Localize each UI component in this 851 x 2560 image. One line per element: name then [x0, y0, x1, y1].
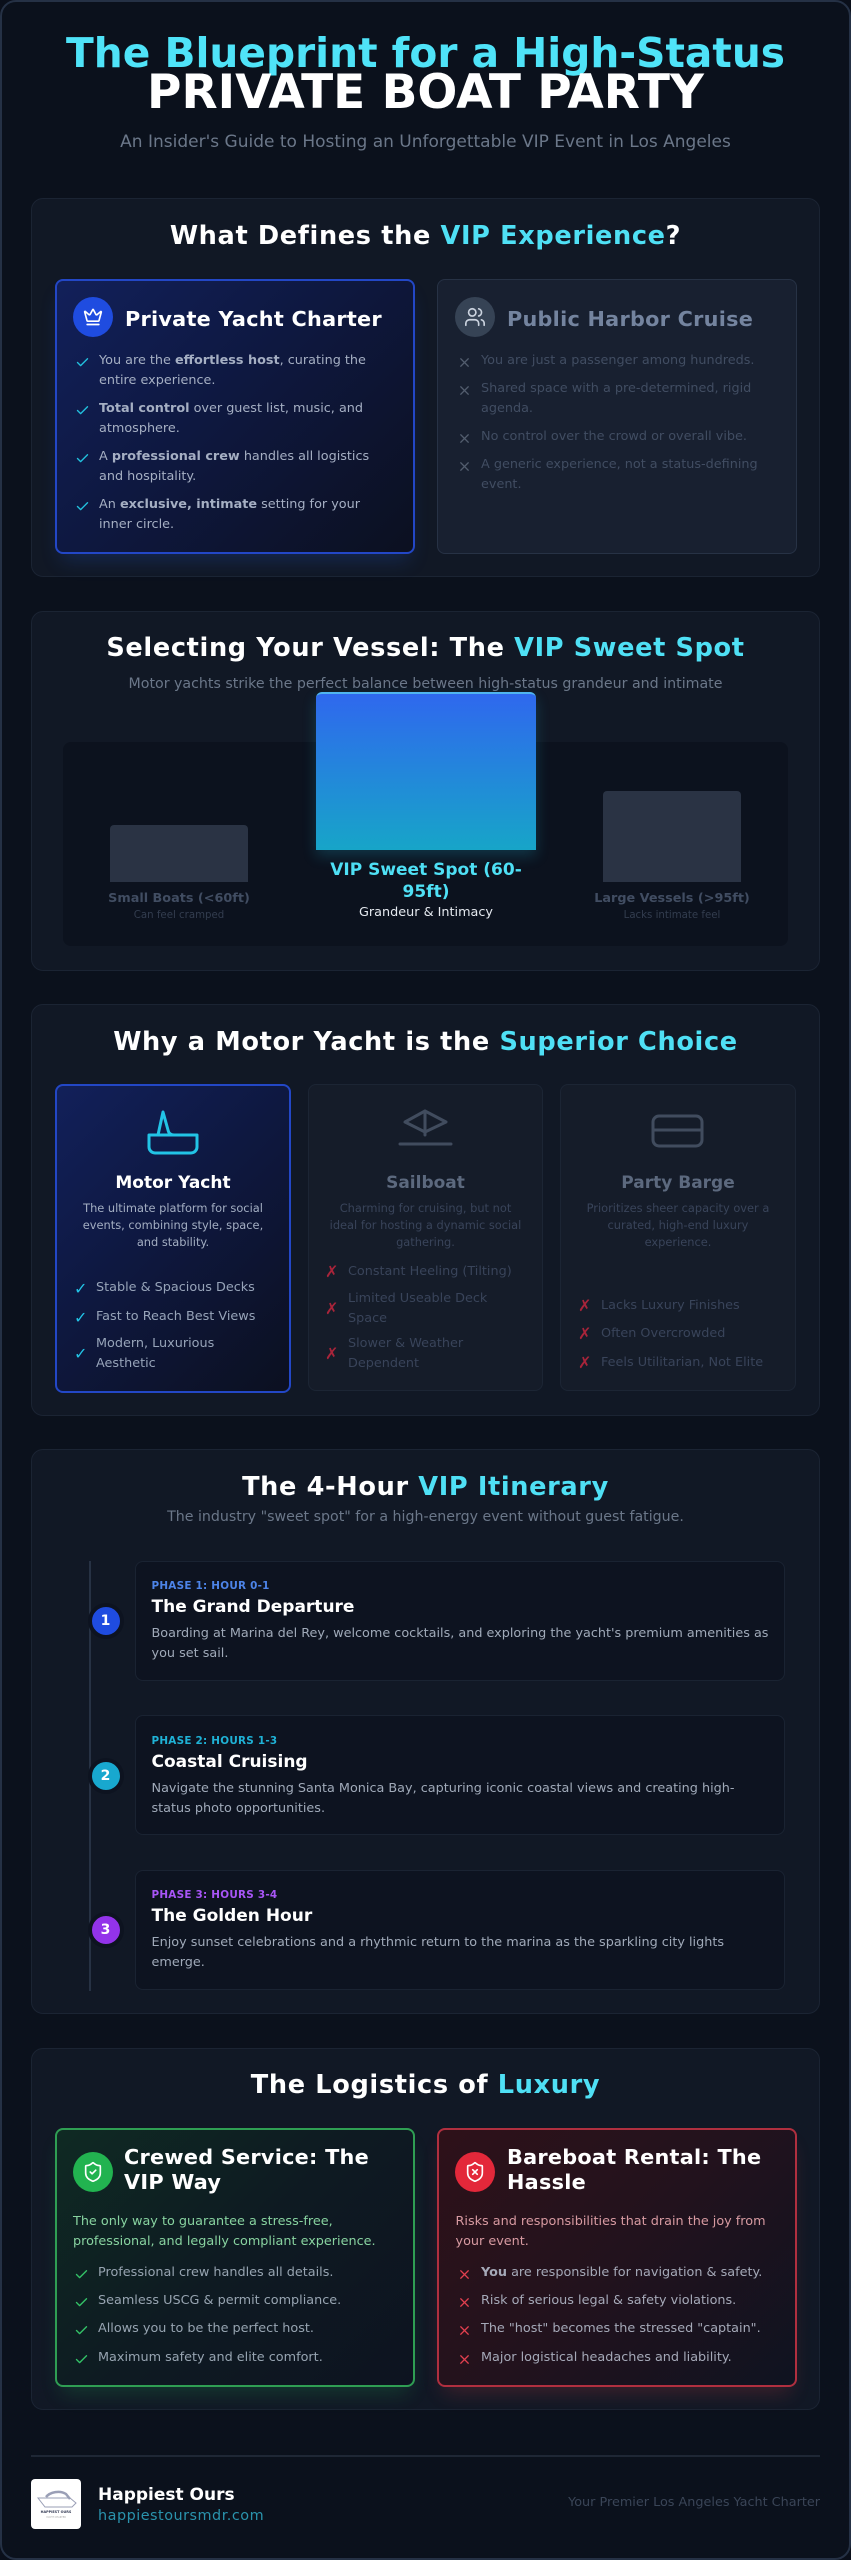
- timeline card 1: [135, 1561, 785, 1681]
- text: ✗: [578, 1324, 591, 1343]
- card description: party barge: curated, high-end luxury: [608, 1218, 748, 1232]
- panel: private yacht charter: [55, 279, 415, 554]
- step description 1: [152, 1626, 768, 1661]
- chart backdrop: [63, 742, 788, 946]
- feature: Often Overcrowded: [601, 1326, 725, 1341]
- card description: motor yacht: [83, 1201, 263, 1249]
- list item: Seamless USCG & permit compliance.: [98, 2293, 341, 2308]
- text: ✓: [74, 1308, 87, 1327]
- node 1: 1: [101, 1613, 110, 1629]
- step description 3: [152, 1935, 724, 1970]
- step title 1: The Grand Departure: [152, 1597, 354, 1617]
- card description: sailboat: gathering.: [396, 1235, 455, 1249]
- list item: [76, 353, 366, 388]
- feature: Modern, Luxurious: [96, 1336, 214, 1351]
- feature: Limited Useable Deck: [348, 1291, 487, 1306]
- step description 2: [152, 1781, 734, 1816]
- node 2: 2: [101, 1768, 110, 1784]
- panel: motor yacht comparison: [31, 1004, 820, 1416]
- card title: crewed service: [124, 2145, 369, 2194]
- icon: party barge: [652, 1114, 704, 1148]
- list item: You are just a passenger among hundreds.: [481, 353, 754, 368]
- panel: vessel selection: [31, 611, 820, 971]
- card title: motor yacht: Motor Yacht: [115, 1173, 231, 1193]
- feature: [325, 1336, 464, 1371]
- list item: [76, 497, 360, 532]
- title: The Blueprint for a High-Status: [66, 29, 785, 77]
- step description 2: Navigate the stunning Santa Monica Bay, capturing iconic coastal views and creating high-: [152, 1781, 734, 1796]
- card description: motor yacht: and stability.: [137, 1235, 209, 1249]
- footer link: happiestoursmdr.com: [98, 2508, 264, 2524]
- footer logo: [31, 2479, 81, 2529]
- heading: logistics: The Logistics of Luxury: [251, 2070, 600, 2100]
- list item: [76, 449, 369, 484]
- list item: [460, 381, 751, 416]
- feature: [325, 1262, 512, 1281]
- list item: [460, 457, 758, 492]
- feature: Stable & Spacious Decks: [96, 1280, 255, 1295]
- list item: and hospitality.: [99, 469, 196, 484]
- card title: bareboat rental: Bareboat Rental: The: [507, 2145, 761, 2169]
- feature: Feels Utilitarian, Not Elite: [601, 1355, 763, 1370]
- heading: itinerary: The 4-Hour VIP Itinerary: [242, 1472, 609, 1502]
- feature: Constant Heeling (Tilting): [348, 1264, 512, 1279]
- node 2: [88, 1758, 124, 1794]
- card title: bareboat rental: [507, 2145, 761, 2194]
- step description 3: emerge.: [152, 1955, 205, 1970]
- card description: sailboat: [330, 1201, 521, 1249]
- list item: event.: [481, 477, 522, 492]
- footer brand name: Happiest Ours: [98, 2485, 235, 2505]
- panel: crewed service: [55, 2128, 415, 2387]
- heading: VIP experience: What Defines the VIP Experience?: [170, 221, 681, 251]
- icon: sailboat: [398, 1110, 452, 1146]
- footer logo: YACHT CHARTER: [46, 2516, 66, 2519]
- heading: superior choice: Why a Motor Yacht is the Superior Choice: [113, 1027, 738, 1057]
- feature: Space: [348, 1311, 387, 1326]
- subtitle: An Insider's Guide to Hosting an Unforgettable VIP Event in Los Angeles: [120, 132, 731, 152]
- feature: Slower & Weather: [348, 1336, 463, 1351]
- card intro: bareboat rental: [456, 2214, 766, 2249]
- panel: party barge card: [560, 1084, 796, 1391]
- node 3: [88, 1912, 124, 1948]
- card description: sailboat: ideal for hosting a dynamic social: [330, 1218, 521, 1232]
- phase label 2: PHASE 2: HOURS 1-3: [152, 1735, 277, 1747]
- feature: Lacks Luxury Finishes: [601, 1298, 740, 1313]
- list item: Shared space with a pre-determined, rigid: [481, 381, 751, 396]
- card title: private yacht charter: Private Yacht Charter: [125, 307, 382, 331]
- list item: Allows you to be the perfect host.: [98, 2321, 314, 2336]
- icon: shield x: [455, 2152, 495, 2192]
- card description: motor yacht: events, combining style, space,: [83, 1218, 263, 1232]
- icon: motor yacht: [148, 1110, 198, 1154]
- list item: [76, 401, 363, 436]
- card intro: bareboat rental: your event.: [456, 2234, 529, 2249]
- panel: bareboat rental: [437, 2128, 797, 2387]
- list item: An exclusive, intimate setting for your: [99, 497, 360, 512]
- card description: party barge: [587, 1201, 769, 1249]
- step title 3: The Golden Hour: [152, 1906, 312, 1926]
- feature: Aesthetic: [96, 1356, 156, 1371]
- section subtitle: The industry "sweet spot" for a high-energy event without guest fatigue.: [167, 1509, 684, 1525]
- list item: agenda.: [481, 401, 533, 416]
- feature: [578, 1353, 763, 1372]
- node 3: 3: [101, 1922, 110, 1938]
- card description: sailboat: Charming for cruising, but not: [340, 1201, 511, 1215]
- list item: Maximum safety and elite comfort.: [98, 2350, 323, 2365]
- list item: A professional crew handles all logistics: [99, 449, 369, 464]
- list item: entire experience.: [99, 373, 215, 388]
- panel: logistics: [31, 2048, 820, 2410]
- card title: sailboat: Sailboat: [386, 1173, 465, 1193]
- timeline card 3: [135, 1870, 785, 1990]
- feature: [74, 1308, 255, 1327]
- step title 2: Coastal Cruising: [152, 1752, 308, 1772]
- timeline line: [89, 1561, 91, 1991]
- bar: small boats: [110, 825, 248, 882]
- feature: Dependent: [348, 1356, 419, 1371]
- node 1: [88, 1603, 124, 1639]
- panel: motor yacht card: [55, 1084, 291, 1393]
- label: small boats: Small Boats (<60ft): [108, 891, 250, 906]
- list item: Total control over guest list, music, and: [99, 401, 363, 416]
- card title: bareboat rental: Hassle: [507, 2170, 586, 2194]
- list item: Risk of serious legal & safety violations.: [481, 2293, 736, 2308]
- card description: motor yacht: The ultimate platform for social: [83, 1201, 263, 1215]
- text: ✗: [325, 1299, 338, 1318]
- list item: No control over the crowd or overall vibe.: [481, 429, 747, 444]
- icon: crown: [73, 297, 113, 337]
- card title: party barge: Party Barge: [621, 1173, 735, 1193]
- step description 2: status photo opportunities.: [152, 1801, 325, 1816]
- bar: large vessels: [603, 791, 741, 882]
- text: ✓: [74, 1344, 87, 1363]
- list item: inner circle.: [99, 517, 174, 532]
- panel: public harbor cruise: [437, 279, 797, 554]
- label: large vessels: Large Vessels (>95ft): [594, 891, 750, 906]
- panel: sailboat card: [308, 1084, 543, 1391]
- feature: [578, 1324, 725, 1343]
- phase label 1: PHASE 1: HOUR 0-1: [152, 1580, 270, 1592]
- feature: [325, 1291, 487, 1326]
- caption: VIP sweet spot: Grandeur & Intimacy: [359, 905, 493, 920]
- section subtitle: Motor yachts strike the perfect balance between high-status grandeur and intimate: [129, 676, 722, 692]
- footer logo: HAPPIEST OURS: [41, 2510, 72, 2514]
- panel: itinerary: [31, 1449, 820, 2014]
- card intro: crewed service: The only way to guarantee a stress-free,: [73, 2214, 333, 2229]
- label: VIP sweet spot: VIP Sweet Spot (60-95ft): [330, 860, 522, 902]
- list item: atmosphere.: [99, 421, 180, 436]
- feature: [74, 1336, 214, 1371]
- card intro: crewed service: professional, and legally compliant experience.: [73, 2234, 376, 2249]
- card title: public harbor cruise: Public Harbor Cruise: [507, 307, 753, 331]
- feature: Fast to Reach Best Views: [96, 1309, 255, 1324]
- text: ✗: [578, 1353, 591, 1372]
- list item: A generic experience, not a status-defining: [481, 457, 758, 472]
- feature: [578, 1296, 740, 1315]
- card intro: crewed service: [72, 2214, 376, 2249]
- phase label 3: PHASE 3: HOURS 3-4: [152, 1889, 277, 1901]
- caption: small boats: Can feel cramped: [134, 910, 224, 921]
- text: ✗: [325, 1262, 338, 1281]
- card title: crewed service: VIP Way: [124, 2170, 221, 2194]
- card description: party barge: experience.: [645, 1235, 711, 1249]
- text: ✗: [578, 1296, 591, 1315]
- footer tagline: Your Premier Los Angeles Yacht Charter: [568, 2495, 820, 2510]
- step description 1: Boarding at Marina del Rey, welcome cocktails, and exploring the yacht's premium amenities as: [152, 1626, 768, 1641]
- heading: vessel selection: Selecting Your Vessel: The VIP Sweet Spot: [106, 633, 745, 663]
- list item: You are the effortless host, curating the: [99, 353, 366, 368]
- text: ✓: [74, 1279, 87, 1298]
- bar: VIP sweet spot: [316, 692, 536, 850]
- card title: crewed service: Crewed Service: The: [124, 2145, 369, 2169]
- step description 3: Enjoy sunset celebrations and a rhythmic return to the marina as the sparkling city lights: [152, 1935, 724, 1950]
- icon: shield check: [73, 2152, 113, 2192]
- feature: [74, 1279, 255, 1298]
- panel: VIP experience: [31, 198, 820, 577]
- timeline card 2: [135, 1715, 785, 1835]
- list item: You are responsible for navigation & safety.: [481, 2265, 762, 2280]
- icon: users: [455, 297, 495, 337]
- list item: Professional crew handles all details.: [98, 2265, 333, 2280]
- title line two: PRIVATE BOAT PARTY: [147, 65, 704, 120]
- caption: large vessels: Lacks intimate feel: [624, 910, 720, 921]
- card description: party barge: Prioritizes sheer capacity over a: [587, 1201, 769, 1215]
- list item: Major logistical headaches and liability.: [481, 2350, 732, 2365]
- step description 1: you set sail.: [152, 1646, 228, 1661]
- list item: The "host" becomes the stressed "captain".: [481, 2321, 761, 2336]
- card intro: bareboat rental: Risks and responsibilities that drain the joy from: [456, 2214, 766, 2229]
- text: ✗: [325, 1344, 338, 1363]
